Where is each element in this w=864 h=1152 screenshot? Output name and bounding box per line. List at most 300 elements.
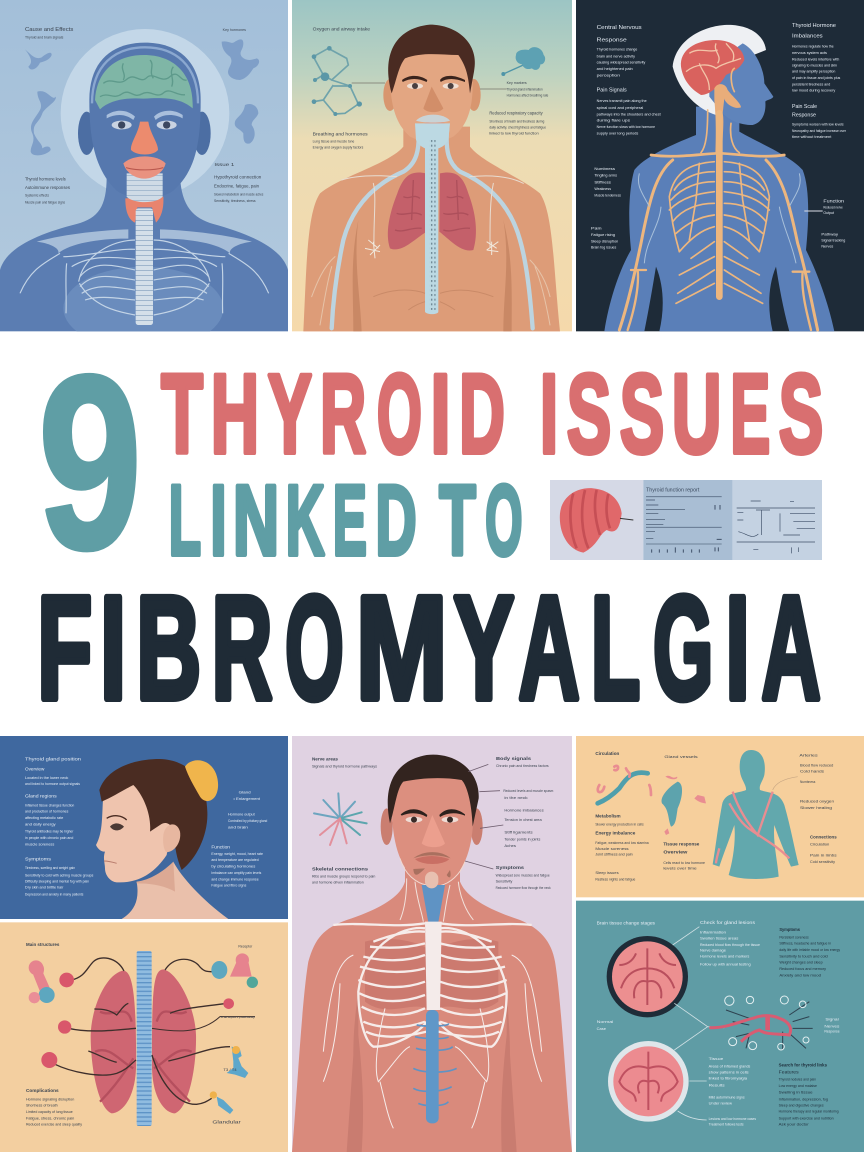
captions: Thyroid hormone levels: [25, 176, 66, 181]
captions: Lung tissue and muscle tone: [313, 140, 354, 144]
title: linked to: N: [233, 464, 279, 576]
captions: Fatigue, stress, chronic pain: [26, 1116, 74, 1120]
captions dark: daily life with irritable mood or low energy: [779, 948, 840, 952]
captions light: Lesions and low hormone cases: [709, 1117, 756, 1121]
captions: Numbness: [594, 167, 615, 171]
captions: Hormone signaling disruption: [26, 1097, 74, 1101]
thyroid bun: [185, 760, 218, 801]
captions: Controlled by pituitary gland: [228, 819, 267, 823]
captions light: Signal: [825, 1018, 839, 1022]
captions: Main structures: [26, 942, 60, 948]
report lines: Thyroid function report: [646, 487, 700, 493]
captions: and production of hormones: [25, 810, 68, 814]
captions: Numbness: [800, 780, 816, 784]
captions light: Brain tissue change stages: [597, 920, 656, 925]
captions: Slowed metabolism and muscle aches: [214, 192, 264, 196]
captions: affecting metabolic rate: [25, 816, 63, 820]
halo behind head: [61, 29, 229, 198]
title: thyroid issues: U: [672, 350, 722, 476]
captions: Cause and Effects: [25, 27, 74, 33]
captions: linked to low thyroid function: [489, 132, 539, 136]
captions: and linked to hormone output signals: [25, 782, 80, 786]
captions: Reduced levels and muscle spasm: [503, 789, 554, 793]
captions: Symptoms: [496, 865, 524, 871]
torso: [303, 127, 560, 331]
teal figure: [713, 750, 799, 879]
captions light: Tissue: [709, 1057, 723, 1061]
captions dark: Hormone therapy and regular monitoring: [779, 1110, 839, 1114]
captions: Stiff ligaments: [504, 831, 533, 835]
captions: Dry skin and brittle hair: [25, 886, 64, 890]
panel: man with white ribcage: [292, 736, 572, 1152]
lips: [123, 156, 166, 179]
ribs network: [669, 162, 769, 303]
head: [383, 25, 481, 142]
captions dark: Support with exercise and nutrition: [779, 1116, 834, 1120]
captions: Difficulty sleeping and mental fog with pain: [25, 879, 89, 883]
captions: spinal cord and peripheral: [597, 106, 644, 110]
captions: Brain fog issues: [591, 246, 616, 250]
arm nerves: [638, 173, 800, 263]
captions: Issue 1: [214, 162, 235, 167]
captions dark: Inflammation, depression, fog: [779, 1097, 828, 1101]
captions: Pain in limbs: [810, 854, 837, 858]
captions: Hormones affect breathing rate: [507, 94, 548, 98]
captions: Reduced hormone flow through the neck: [496, 886, 551, 890]
title: fibromyalgia: I: [725, 566, 750, 730]
captions: Cells react to low hormone: [663, 861, 705, 865]
facial features: [400, 809, 465, 886]
title: linked to: I: [210, 464, 227, 576]
title: thyroid issues: O: [377, 350, 422, 476]
captions: Thyroid and brain signals: [25, 35, 64, 39]
captions: Nerves: [821, 245, 833, 249]
captions: Endocrine, fatigue, pain: [214, 184, 259, 189]
captions: [595, 751, 837, 882]
grey moustache: [416, 115, 450, 123]
captions: Tissue response: [663, 842, 700, 847]
captions light: Reduced blood flow through the tissue: [700, 943, 760, 947]
panel: man with lungs and trachea: [292, 0, 572, 331]
captions: and heightened pain: [597, 67, 633, 71]
captions: Reduced levels interfere with: [792, 57, 839, 61]
captions light: Results: [709, 1083, 725, 1087]
captions: Gland regions: [25, 794, 57, 800]
title: fibromyalgia: M: [356, 566, 448, 730]
captions: Symptoms worsen with low levels: [792, 123, 844, 127]
title: numeral 9: 9: [38, 323, 142, 601]
captions dark: Persistent soreness: [779, 935, 809, 939]
captions: Aches: [504, 844, 516, 848]
brainstem: [714, 84, 741, 153]
captions: Imbalances: [792, 34, 823, 40]
captions: Muscle tenderness: [594, 194, 621, 198]
arm and muscle shading: [353, 220, 512, 331]
title: fibromyalgia: L: [591, 566, 640, 730]
captions: Sleep disruption: [591, 239, 618, 243]
radial neuron icon: [314, 793, 367, 845]
captions: Complications: [26, 1088, 59, 1094]
face features: [402, 76, 465, 128]
captions light: Inflammation: [700, 930, 726, 934]
text: O: [485, 464, 522, 576]
title: fibromyalgia: I: [100, 566, 126, 730]
captions: Hormone imbalances: [504, 809, 544, 813]
captions light: Under review: [709, 1102, 733, 1106]
upper tissue circle: [607, 936, 688, 1017]
captions: Hypothyroid connection: [214, 174, 262, 179]
captions: Located in the lower neck: [25, 776, 69, 780]
captions: muscle soreness: [25, 842, 55, 846]
title: linked to: D: [376, 464, 417, 576]
brain: [95, 55, 193, 109]
captions: Reduced respiratory capacity: [489, 111, 543, 116]
captions: Neuropathy and fatigue increase over: [792, 129, 847, 133]
captions: during flare ups: [597, 119, 630, 123]
captions: Thyroid gland inflammation: [507, 87, 543, 91]
jaw shadow: [137, 862, 175, 892]
lungs: [388, 172, 476, 251]
captions: Reduced nerve: [823, 206, 843, 210]
nose: [131, 122, 158, 154]
lung lobes: [91, 969, 196, 1113]
hair: [99, 759, 207, 870]
panel: blue face with neck and ribcage: [0, 0, 288, 350]
captions: Circulation: [810, 843, 829, 847]
captions: Response: [597, 38, 627, 44]
captions: Central Nervous: [597, 25, 642, 31]
connector wires: [55, 958, 255, 1104]
chest shadow: [365, 939, 498, 1009]
captions: Tender points in joints: [504, 837, 541, 841]
panel: nervous system on dark background: [576, 0, 864, 331]
head: [78, 43, 211, 198]
captions dark: Features: [779, 1069, 799, 1074]
brain: [681, 40, 744, 95]
callout line: [804, 209, 823, 212]
captions light: [597, 920, 840, 1127]
captions: [591, 23, 847, 250]
captions: T3 / T4: [223, 1068, 237, 1072]
callout lines: [352, 83, 507, 89]
sternum: [425, 922, 442, 1010]
captions dark: Sensitivity to touch and cold: [779, 954, 828, 958]
title: fibromyalgia: B: [136, 566, 201, 730]
captions: Pain Scale: [792, 104, 817, 110]
captions: Sleep issues: [595, 871, 619, 875]
captions dark: Thyroid nodules and pain: [779, 1078, 816, 1082]
captions dark: Reduced focus and memory: [779, 967, 826, 971]
captions: Nerves transmit pain along the: [597, 99, 647, 103]
captions dark: Symptoms: [779, 927, 800, 932]
panel: lungs with spine and connectors: [0, 922, 288, 1152]
captions: • Enlargement: [233, 797, 260, 801]
title: fibromyalgia: O: [285, 566, 344, 730]
arm shading: [347, 988, 517, 1152]
captions: Ribs and muscle groups respond to pain: [312, 875, 375, 879]
neck tube: [422, 872, 445, 922]
captions: Thyroid hormones change: [597, 48, 637, 52]
white ribcage: [323, 923, 542, 1128]
title: fibromyalgia: F: [37, 566, 92, 730]
torso and neck: [0, 177, 288, 331]
molecule left: [312, 46, 362, 116]
trachea rings: [127, 173, 163, 202]
report lines: [646, 487, 722, 553]
captions: Hormone output: [228, 812, 255, 816]
captions: [313, 26, 548, 150]
title: fibromyalgia: R: [212, 566, 272, 730]
head: [673, 25, 773, 125]
captions: perception: [597, 74, 620, 78]
captions: Slower healing: [800, 806, 832, 810]
eyes and brows: [107, 111, 183, 129]
captions light: Follow up with annual testing: [700, 963, 751, 967]
captions: Body signals: [496, 756, 531, 762]
body: [604, 107, 834, 331]
captions: Fatigue rising: [591, 233, 615, 237]
captions: Stiffness: [594, 180, 611, 184]
captions light: Normal: [597, 1020, 614, 1024]
captions light: linked to fibromyalgia: [709, 1077, 747, 1081]
captions: Joint stiffness and pain: [595, 853, 633, 857]
captions: Shortness of breath and tiredness during: [489, 119, 544, 123]
blue spine: [413, 1010, 457, 1123]
captions: and hormone driven inflammation: [312, 881, 364, 885]
captions: Imbalance can amplify pain levels: [211, 871, 261, 875]
lab chart: [737, 501, 815, 553]
title: thyroid issues: I: [430, 350, 451, 476]
title: thyroid issues: D: [459, 350, 505, 476]
captions dark: Anxiety and low mood: [779, 973, 821, 977]
captions: Widespread sore muscles and fatigue: [496, 874, 550, 878]
spine: [136, 208, 153, 325]
captions: [312, 756, 554, 890]
captions: Inflamed tissue changes function: [25, 803, 74, 807]
captions: Overview: [663, 849, 688, 854]
captions: Connections: [810, 835, 837, 840]
captions: Energy and oxygen supply factors: [313, 146, 364, 150]
title: fibromyalgia: Y: [454, 566, 514, 730]
captions: Reduced exercise and sleep quality: [26, 1123, 82, 1127]
captions: Thyroid Hormone: [792, 23, 836, 29]
captions: Hormones regulate how the: [792, 45, 834, 49]
neck nerves: [400, 878, 473, 922]
captions: Shortness of breath: [26, 1104, 58, 1108]
head: [381, 755, 483, 885]
captions: Key markers: [507, 81, 527, 85]
windpipe: [415, 123, 450, 314]
captions: Sensitivity to cold with aching muscle groups: [25, 873, 93, 877]
captions: and temperature are regulated: [211, 858, 259, 862]
captions light: Case: [597, 1027, 606, 1031]
captions: Nerve areas: [312, 756, 338, 762]
captions: and daily energy: [25, 823, 56, 827]
title: linked to: K: [286, 464, 324, 576]
captions: Sensitivity, tiredness, stress: [214, 199, 256, 203]
title: thyroid issues: T: [161, 350, 203, 476]
captions: pathways into the shoulders and chest: [597, 112, 661, 116]
captions: Function: [823, 199, 844, 204]
captions: Blood flow reduced: [800, 763, 833, 767]
captions: Breathing and hormones: [313, 131, 368, 136]
captions: Depression and anxiety in many patients: [25, 893, 83, 897]
title: thyroid issues: S: [620, 350, 664, 476]
captions: in the neck: [504, 796, 528, 800]
torso: [292, 862, 572, 1152]
captions: Pathway: [821, 233, 838, 237]
captions: Skeletal connections: [312, 867, 368, 873]
captions: Arteries: [799, 753, 818, 758]
captions light: Mild autoimmune signs: [709, 1096, 745, 1100]
callout line: [773, 777, 798, 790]
captions: Transport pathway: [220, 1015, 256, 1019]
captions: Thyroid gland position: [25, 756, 81, 762]
captions: [25, 756, 267, 897]
captions: Cold sensitivity: [810, 860, 835, 864]
captions: Tension in chest area: [504, 818, 542, 822]
molecule icons: [25, 39, 259, 155]
captions: and change immune response: [211, 877, 259, 881]
molecules left: [29, 960, 74, 1068]
captions: of pain in tissue and joints plus: [792, 76, 840, 80]
title: thyroid issues: H: [211, 350, 259, 476]
captions: by circulating hormones: [211, 864, 256, 868]
captions light: Nerves: [824, 1024, 840, 1028]
title: thyroid issues: S: [567, 350, 611, 476]
title: thyroid issues: S: [779, 350, 823, 476]
panel: teal with brain tissue circles: [576, 901, 864, 1152]
captions: Signal tracking: [821, 239, 845, 243]
ear: [163, 824, 180, 852]
vessel diagram: [598, 766, 651, 803]
collarbones: [37, 229, 252, 253]
captions: Circulation: [595, 751, 619, 757]
captions: levels over time: [663, 866, 697, 870]
captions dark: Low energy and malaise: [779, 1084, 817, 1088]
captions: Function: [211, 844, 230, 849]
captions: Fatigue, weakness and low stamina: [595, 841, 649, 845]
captions dark: Sleep and digestive changes: [779, 1103, 824, 1107]
neural network illustration: [709, 996, 813, 1050]
captions: [26, 942, 256, 1127]
captions: Sensitivity: [496, 880, 513, 884]
captions: Oxygen and airway intake: [313, 26, 370, 31]
captions: Gland vessels: [664, 754, 698, 759]
captions: causing widespread sensitivity: [597, 61, 645, 65]
captions: supply over long periods: [597, 131, 639, 135]
lower tissue circle: [608, 1041, 689, 1122]
captions: Chronic pain and tiredness factors: [496, 764, 549, 768]
eye, brow, mouth: [104, 816, 127, 863]
card middle section: [643, 480, 733, 560]
captions: Pain: [591, 226, 602, 230]
card left section: [550, 480, 643, 560]
captions: Key hormones: [223, 28, 246, 32]
title: linked to: E: [333, 464, 367, 576]
chest folds: [373, 290, 493, 310]
panel: peach figures with blood vessels: [576, 736, 864, 897]
captions: Reduced oxygen: [800, 799, 834, 803]
captions: Symptoms: [25, 856, 52, 862]
captions: time without treatment: [792, 135, 831, 139]
captions: Restless nights and fatigue: [595, 878, 635, 882]
captions: Pain Signals: [597, 88, 627, 94]
captions: in people with chronic pain and: [25, 836, 73, 840]
captions light: Check for gland lesions: [700, 920, 756, 925]
title: thyroid issues: E: [730, 350, 770, 476]
panel: woman profile with thyroid: [0, 736, 288, 919]
captions: Tingling arms: [594, 174, 617, 178]
captions dark: [779, 927, 840, 1127]
molecules right: [210, 953, 258, 1114]
title: thyroid issues: Y: [268, 350, 312, 476]
title: fibromyalgia: A: [518, 566, 580, 730]
captions: low mood during recovery: [792, 89, 835, 93]
captions: Tiredness, swelling and weight gain: [25, 866, 75, 870]
thyroid illustration: [560, 488, 633, 553]
abdomen shading: [64, 267, 222, 332]
captions light: Swollen tissue areas: [700, 936, 739, 940]
captions: [25, 27, 264, 204]
spine: [137, 951, 152, 1126]
captions dark: Weight changes and sleep: [779, 961, 823, 965]
captions: Thyroid antibodies may be higher: [25, 829, 74, 833]
captions: Overview: [25, 766, 45, 772]
captions: Autoimmune responses: [25, 185, 71, 190]
captions: Fatigue and fibro signs: [211, 884, 246, 888]
captions: Weakness: [594, 187, 611, 191]
captions: Muscle soreness: [595, 847, 629, 851]
title: linked to: L: [169, 464, 201, 576]
captions light: Response: [824, 1029, 840, 1033]
callout lines: [673, 927, 724, 1120]
captions: Output: [823, 211, 834, 215]
captions: Gland: [239, 791, 251, 795]
captions dark: Swelling in tissue: [779, 1090, 813, 1094]
title: thyroid issues: R: [320, 350, 366, 476]
captions: Energy, weight, mood, heart rate: [211, 852, 263, 856]
captions dark: Search for thyroid links: [779, 1062, 827, 1067]
captions: Glandular: [212, 1119, 241, 1125]
captions dark: Ask your doctor: [779, 1123, 810, 1127]
captions: daily activity, chest tightness and fatigue: [489, 126, 546, 130]
captions: persistent tiredness and: [792, 82, 830, 86]
captions: nervous system acts: [792, 51, 827, 55]
molecule right: [501, 47, 545, 76]
captions light: Treatment follows tests: [709, 1123, 744, 1127]
title: linked to: T: [439, 464, 476, 576]
captions: Slower energy production in cells: [595, 823, 644, 827]
captions: and may amplify perception: [792, 70, 835, 74]
nerve network: [619, 68, 818, 330]
captions: Cold hands: [800, 769, 824, 773]
nerve clusters: [365, 240, 498, 258]
captions light: show patterns in cells: [709, 1071, 749, 1075]
title: thyroid issues: I: [540, 350, 558, 476]
title: fibromyalgia: G: [653, 566, 713, 730]
captions: brain and nerve activity: [597, 54, 635, 58]
captions: Limited capacity of lung tissue: [26, 1110, 73, 1114]
face: [96, 775, 173, 882]
captions: Receptor: [238, 945, 253, 949]
thyroid: [125, 197, 163, 223]
captions: Metabolism: [595, 813, 621, 818]
captions light: Areas of inflamed glands: [709, 1064, 751, 1068]
captions: signaling to muscles and skin: [792, 64, 837, 68]
neck and shoulders: [122, 862, 228, 919]
captions: Muscle pain and fatigue signs: [25, 200, 65, 204]
